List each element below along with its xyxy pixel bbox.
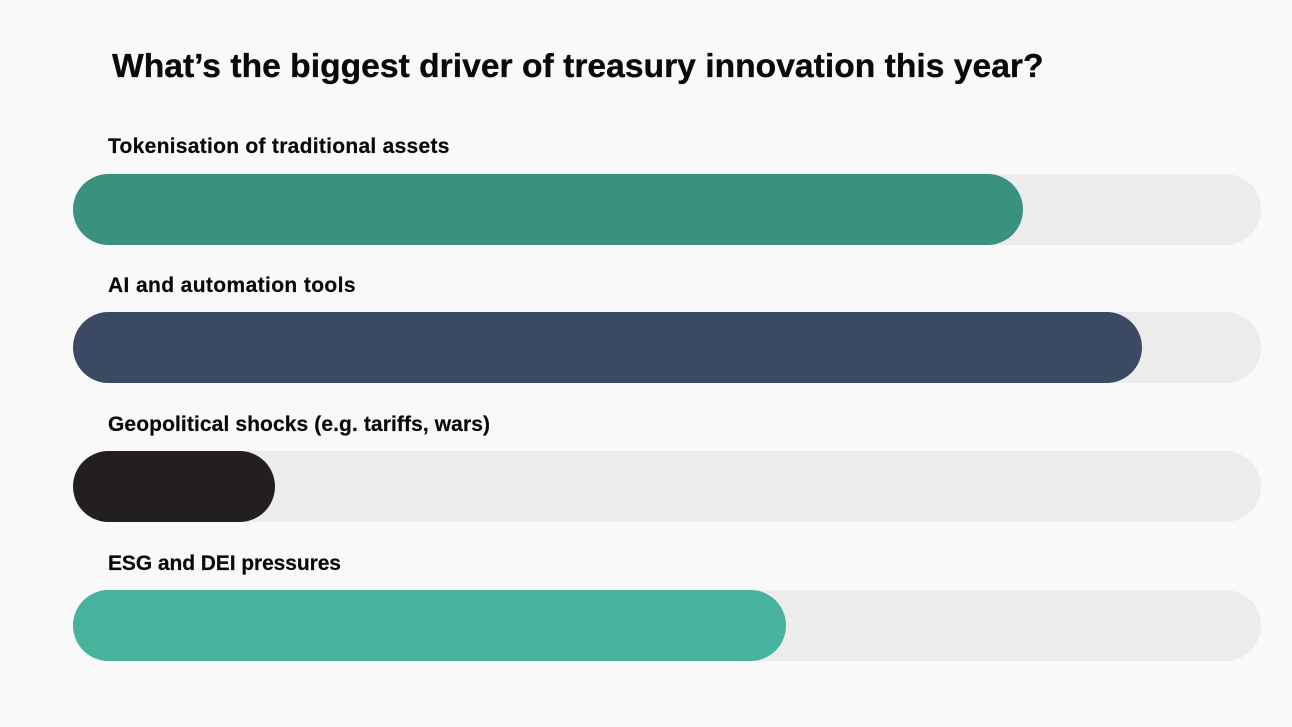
label: tokenisation: Tokenisation of traditional assets — [108, 135, 450, 158]
bar: AI — [73, 312, 1261, 383]
bar fill: geopolitical — [73, 451, 275, 522]
label: ESG: ESG and DEI pressures — [108, 552, 341, 575]
title: What’s the biggest driver of treasury innovation this year? — [112, 48, 1044, 85]
bar: tokenisation — [73, 174, 1261, 245]
label: AI: AI and automation tools — [108, 274, 356, 297]
bar: geopolitical — [73, 451, 1261, 522]
bar fill: tokenisation — [73, 174, 1023, 245]
bar: ESG — [73, 590, 1261, 661]
bar fill: AI — [73, 312, 1142, 383]
bar fill: ESG — [73, 590, 786, 661]
label: geopolitical: Geopolitical shocks (e.g. tariffs, wars) — [108, 413, 490, 436]
